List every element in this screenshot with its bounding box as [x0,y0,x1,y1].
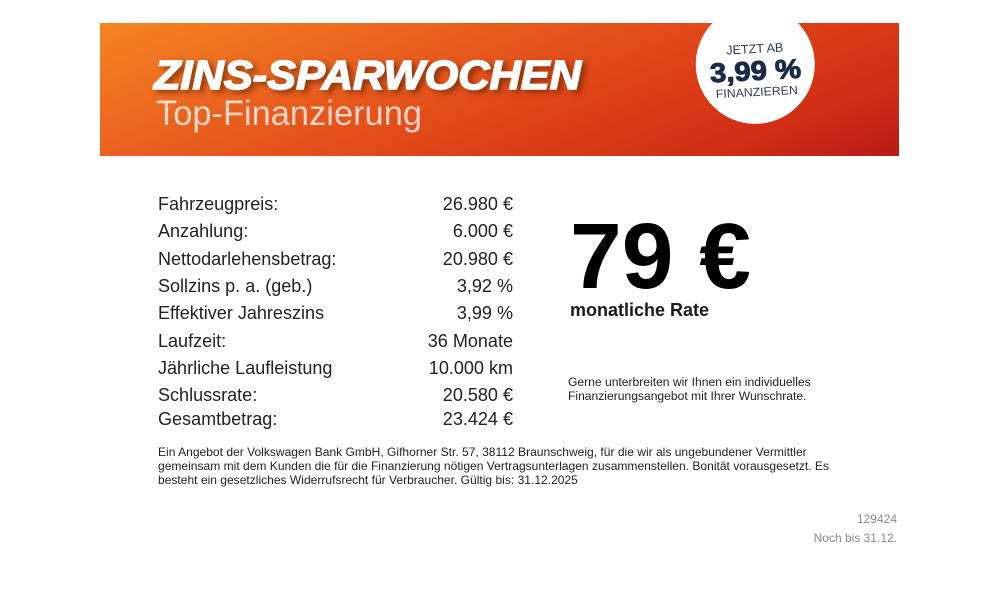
financing table: 20.580 € [443,385,513,405]
rate badge: FINANZIEREN [715,83,798,101]
financing table: 20.980 € [443,249,513,269]
financing table: 10.000 km [429,358,513,378]
individual offer note [568,375,811,403]
individual offer note: Finanzierungsangebot mit Ihrer Wunschrate. [568,389,806,403]
financing table: 3,99 % [457,303,513,323]
financing table: 26.980 € [443,194,513,214]
financing table: Fahrzeugpreis: [158,194,278,214]
financing table: 6.000 € [453,221,513,241]
rate badge: 3,99 % [709,54,802,88]
legal text: besteht ein gesetzliches Widerrufsrecht für Verbraucher. Gültig bis: 31.12.2025 [158,473,578,487]
financing table: Gesamtbetrag: [158,409,277,429]
financing table: Nettodarlehensbetrag: [158,249,336,269]
monthly rate label: monatliche Rate [570,300,709,320]
rate badge: JETZT AB [726,41,784,57]
title: ZINS-SPARWOCHEN [153,52,582,98]
financing table: 36 Monate [428,331,513,351]
rate badge [696,23,815,124]
financing table: Laufzeit: [158,331,226,351]
financing table: Sollzins p. a. (geb.) [158,276,312,296]
legal text: Ein Angebot der Volkswagen Bank GmbH, Gifhorner Str. 57, 38112 Braunschweig, für die wir als ungebundener Vermittler [158,445,807,459]
individual offer note: Gerne unterbreiten wir Ihnen ein individuelles [568,375,811,389]
legal text: gemeinsam mit dem Kunden die für die Finanzierung nötigen Vertragsunterlagen zusammenstellen. Bonität vorausgesetzt. Es [158,459,829,473]
financing table: 23.424 € [443,409,513,429]
subtitle: Top-Finanzierung [156,94,422,133]
validity note: Noch bis 31.12. [814,531,897,545]
financing table [158,194,513,429]
reference number: 129424 [857,512,897,526]
monthly rate amount: 79 € [570,204,751,308]
financing table: Jährliche Laufleistung [158,358,332,378]
legal text [158,445,829,487]
financing table: Schlussrate: [158,385,257,405]
financing table: Effektiver Jahreszins [158,303,324,323]
banner [100,23,899,156]
financing table: 3,92 % [457,276,513,296]
financing table: Anzahlung: [158,221,248,241]
title shadow: ZINS-SPARWOCHEN [157,55,586,101]
